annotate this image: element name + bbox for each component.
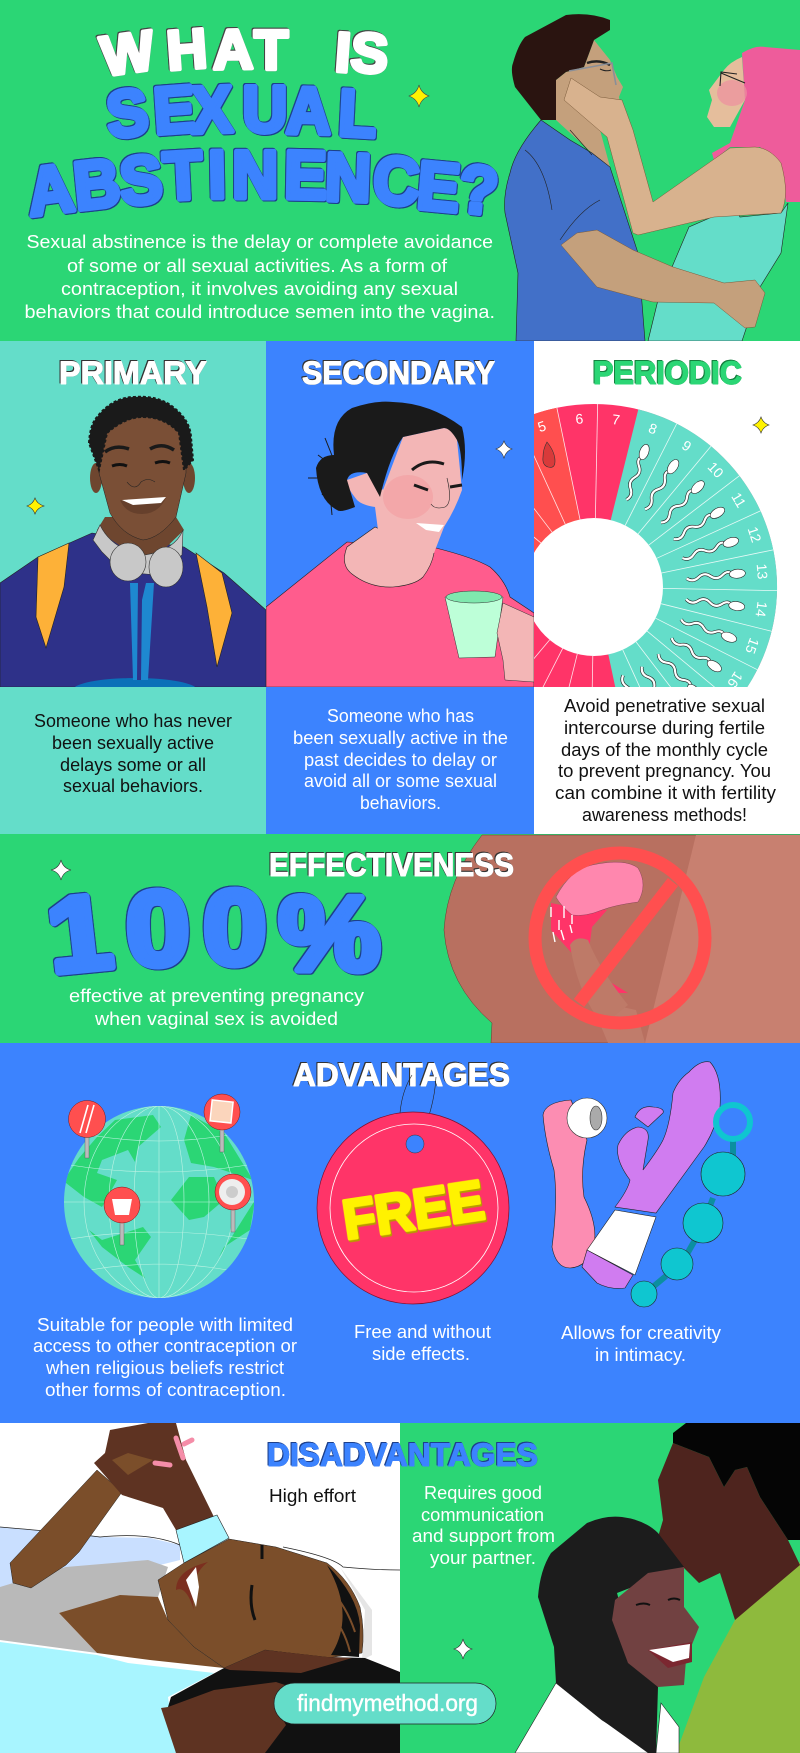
text: periodic description [555, 696, 776, 825]
text: requires good communication: and support from [412, 1526, 555, 1546]
text: periodic description: to prevent pregnancy. You [558, 761, 771, 781]
text: advantage 1: other forms of contraception. [45, 1380, 286, 1400]
heading: secondary: SECONDARY [302, 355, 495, 391]
panel: disadvantages [0, 1423, 800, 1753]
text: advantage 1 [33, 1315, 297, 1400]
panel: primary [0, 341, 266, 834]
text: requires good communication: Requires good [424, 1483, 542, 1503]
chart: cycle wheel [534, 404, 778, 687]
text: advantage 2: Free and without [354, 1322, 491, 1342]
text: advantage 3: in intimacy. [595, 1345, 686, 1365]
title: what is sexual abstinence: ABSTINENCE? [23, 136, 502, 230]
text: secondary description: avoid all or some sexual [304, 771, 497, 791]
intro text: Sexual abstinence is the delay or complete avoidance [26, 232, 493, 252]
illustration: woman with cup [266, 402, 534, 687]
heading: primary: PRIMARY [59, 355, 207, 391]
panel: hero [0, 0, 800, 341]
illustration: couple in bed [0, 1423, 400, 1753]
intro text: behaviors that could introduce semen into the vagina. [24, 302, 495, 322]
panel: periodic [534, 341, 800, 834]
chart: cycle wheel: 6 [575, 410, 584, 427]
text: primary description [34, 711, 232, 796]
text: primary description: delays some or all [60, 755, 206, 775]
text: advantage 3 [561, 1323, 721, 1365]
illustration: globe with pins [64, 1094, 255, 1298]
text: periodic description: days of the monthly cycle [561, 740, 768, 760]
intro text: of some or all sexual activities. As a form of [67, 256, 448, 276]
title: what is sexual abstinence: SEXUAL [103, 71, 378, 152]
icon: yellow sparkle [27, 498, 44, 514]
illustration: no penetration sign [444, 835, 800, 1043]
text: advantage 2 [354, 1322, 491, 1364]
icon: yellow sparkle [409, 85, 429, 107]
text: advantage 2: side effects. [372, 1344, 470, 1364]
text: effectiveness description: effective at preventing pregnancy [69, 986, 364, 1006]
text: periodic description: intercourse during fertile [564, 718, 765, 738]
intro text: contraception, it involves avoiding any sexual [61, 279, 458, 299]
text: advantage 1: Suitable for people with limited [37, 1315, 293, 1335]
text: periodic description: can combine it with fertility [555, 783, 776, 803]
chart: cycle wheel: 16 [724, 669, 746, 691]
icon: yellow sparkle [753, 417, 769, 433]
button: website [274, 1683, 496, 1724]
heading: effectiveness: EFFECTIVENESS [269, 847, 514, 883]
text: primary description: sexual behaviors. [63, 776, 203, 796]
text: requires good communication [412, 1483, 555, 1568]
illustration: free price tag: FREE [338, 1168, 488, 1251]
panel: secondary [266, 341, 534, 834]
text: periodic description: Avoid penetrative sexual [564, 696, 765, 716]
chart: cycle wheel: 8 [646, 420, 660, 438]
text: requires good communication: your partner. [430, 1548, 536, 1568]
text: advantage 1: access to other contraception or [33, 1336, 297, 1356]
chart: cycle wheel: 7 [611, 411, 621, 428]
chart: cycle wheel: 15 [742, 636, 763, 656]
text: secondary description: behaviors. [360, 793, 441, 813]
heading: advantages: ADVANTAGES [293, 1057, 510, 1093]
button: website: findmymethod.org [297, 1690, 478, 1716]
heading: periodic: PERIODIC [593, 355, 742, 391]
illustration: free price tag [317, 1075, 509, 1304]
panel: effectiveness [0, 834, 800, 1043]
text: effectiveness description: when vaginal sex is avoided [94, 1009, 338, 1029]
text: high effort: High effort [269, 1486, 356, 1506]
big number: 100%: 100% [41, 869, 380, 996]
text: requires good communication: communication [421, 1505, 544, 1525]
chart: cycle wheel: 12 [745, 525, 765, 545]
illustration: young man with headphones [0, 397, 266, 702]
text: secondary description: Someone who has [327, 706, 474, 726]
heading: disadvantages: DISADVANTAGES [267, 1437, 538, 1473]
chart: cycle wheel: 5 [536, 417, 548, 435]
text: advantage 1: when religious beliefs restrict [45, 1358, 284, 1378]
text: secondary description: past decides to delay or [304, 750, 497, 770]
text: periodic description: awareness methods! [582, 805, 747, 825]
chart: cycle wheel: 14 [753, 601, 770, 618]
text: secondary description: been sexually active in the [293, 728, 508, 748]
icon: white sparkle [51, 860, 71, 880]
illustration: hugging couple [515, 1423, 800, 1753]
panel: advantages [0, 1043, 800, 1423]
chart: cycle wheel: 9 [679, 437, 695, 455]
chart: cycle wheel: 10 [705, 459, 727, 481]
icon: white sparkle [496, 441, 512, 458]
icon: white sparkle [454, 1639, 472, 1659]
illustration: toys [543, 1062, 750, 1307]
chart: cycle wheel: 11 [728, 490, 750, 510]
text: advantage 3: Allows for creativity [561, 1323, 721, 1343]
title: what is sexual abstinence [23, 16, 502, 230]
text: primary description: Someone who has never [34, 711, 232, 731]
text: primary description: been sexually active [52, 733, 214, 753]
chart: cycle wheel: 13 [754, 563, 771, 580]
title: what is sexual abstinence: WHAT IS [97, 16, 390, 88]
intro text [24, 232, 495, 322]
illustration: couple [505, 14, 800, 341]
text: effectiveness description [69, 986, 364, 1029]
text: secondary description [293, 706, 508, 813]
